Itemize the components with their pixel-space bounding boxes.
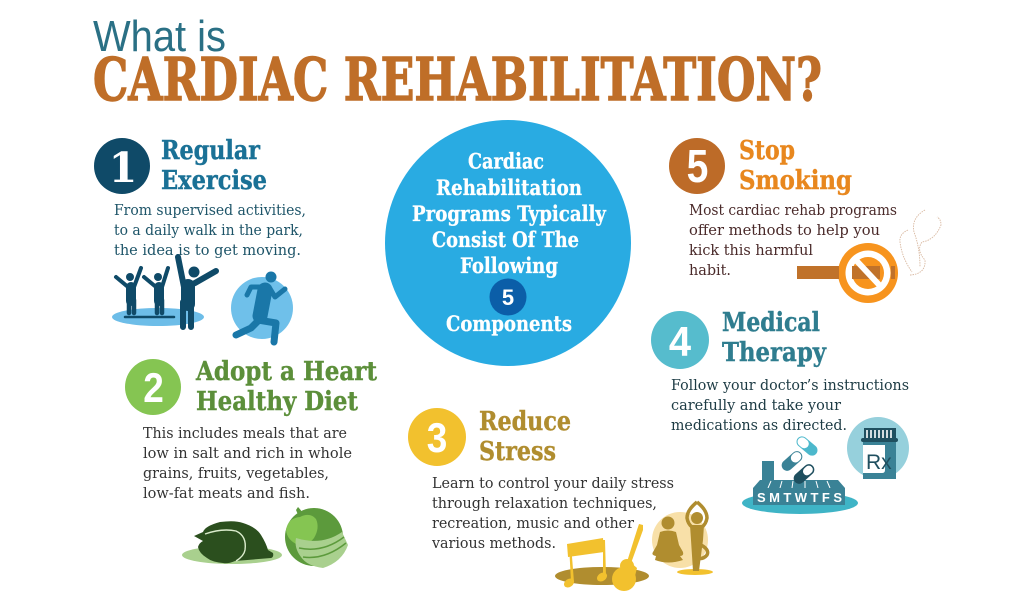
heading: adopt a heart healthy diet: Healthy Diet bbox=[196, 387, 358, 417]
panel: regular exercise bbox=[94, 136, 306, 342]
central circle: Programs Typically bbox=[412, 202, 606, 227]
number badge 4 bbox=[651, 311, 709, 369]
central circle: Following bbox=[460, 254, 558, 279]
heading: reduce stress: Reduce bbox=[479, 407, 571, 437]
icon: weekly pill box: SMTWTFS bbox=[757, 490, 842, 505]
number badge 3: 3 bbox=[427, 415, 447, 462]
icon: prescription bottle bbox=[847, 417, 909, 479]
text: smoking description bbox=[689, 203, 897, 279]
heading: medical therapy: Therapy bbox=[722, 338, 827, 368]
central circle: Components bbox=[446, 312, 572, 337]
central circle: Cardiac bbox=[468, 150, 544, 174]
pill: light bbox=[794, 434, 820, 458]
icon: group of people exercising bbox=[112, 257, 216, 327]
number badge 5: 5 bbox=[687, 141, 708, 193]
number badge 1: 1 bbox=[109, 144, 137, 192]
text: exercise description: to a daily walk in the park, bbox=[114, 223, 303, 239]
icon: apple and cabbage bbox=[285, 507, 348, 568]
icon: no smoking sign bbox=[797, 243, 898, 303]
heading: medical therapy bbox=[722, 308, 827, 368]
panel: heart healthy diet bbox=[125, 357, 377, 568]
text: diet description: grains, fruits, vegetables, bbox=[143, 466, 329, 482]
icon: smoke wisps bbox=[900, 210, 941, 275]
text: stress description: various methods. bbox=[431, 536, 556, 552]
heading: stop smoking: Stop bbox=[739, 136, 795, 166]
heading: reduce stress: Stress bbox=[479, 437, 556, 467]
title: What is bbox=[93, 12, 226, 61]
icon: roast chicken bbox=[182, 521, 282, 564]
text: exercise description: From supervised activities, bbox=[114, 203, 306, 219]
heading: regular exercise: Exercise bbox=[161, 166, 267, 196]
number badge 2 bbox=[125, 359, 181, 415]
panel: stop smoking bbox=[669, 136, 941, 303]
icon: prescription bottle: Rx bbox=[866, 451, 892, 474]
text: smoking description: kick this harmful bbox=[689, 243, 813, 259]
heading: stop smoking: Smoking bbox=[739, 166, 852, 196]
icon: music notes and guitar bbox=[555, 524, 649, 591]
central circle: Rehabilitation bbox=[436, 176, 582, 201]
text: stress description: through relaxation techniques, bbox=[432, 496, 657, 512]
text: diet description: low in salt and rich in whole bbox=[143, 446, 352, 462]
text: therapy description bbox=[671, 378, 909, 434]
panel: reduce stress bbox=[408, 407, 713, 591]
text: exercise description bbox=[114, 203, 306, 259]
heading: reduce stress bbox=[479, 407, 571, 467]
central circle: 5 bbox=[502, 285, 514, 310]
text: therapy description: Follow your doctor’s instructions bbox=[671, 378, 909, 394]
number badge 5 bbox=[669, 138, 725, 194]
text: stress description: recreation, music and other bbox=[432, 516, 634, 532]
heading: regular exercise bbox=[161, 136, 267, 196]
number badge 2: 2 bbox=[143, 365, 164, 412]
pill: dark bbox=[791, 462, 817, 486]
heading: stop smoking bbox=[739, 136, 852, 196]
icon: runner bbox=[231, 272, 293, 342]
heading: adopt a heart healthy diet: Adopt a Heart bbox=[195, 357, 377, 387]
icon: weekly pill box bbox=[742, 434, 858, 514]
text: smoking description: Most cardiac rehab programs bbox=[689, 203, 897, 219]
central circle: Consist Of The bbox=[432, 228, 579, 253]
heading: adopt a heart healthy diet bbox=[195, 357, 377, 417]
text: diet description: This includes meals that are bbox=[143, 426, 347, 442]
pill: mid bbox=[779, 449, 805, 473]
number badge 3 bbox=[408, 408, 466, 466]
icon: yoga figures bbox=[652, 502, 713, 575]
title bbox=[93, 12, 822, 114]
central circle bbox=[385, 120, 631, 366]
text: stress description: Learn to control your daily stress bbox=[432, 476, 674, 492]
text: therapy description: carefully and take your bbox=[671, 398, 841, 414]
heading: medical therapy: Medical bbox=[722, 308, 820, 338]
text: smoking description: offer methods to help you bbox=[689, 223, 880, 239]
text: stress description bbox=[431, 476, 674, 552]
panel: medical therapy bbox=[651, 308, 909, 514]
text: diet description bbox=[143, 426, 352, 502]
number badge 1 bbox=[94, 138, 150, 194]
number badge 4: 4 bbox=[669, 318, 691, 365]
text: smoking description: habit. bbox=[689, 263, 731, 279]
text: exercise description: the idea is to get moving. bbox=[114, 243, 301, 259]
heading: regular exercise: Regular bbox=[161, 136, 260, 166]
text: diet description: low-fat meats and fish. bbox=[143, 486, 310, 502]
text: therapy description: medications as directed. bbox=[671, 418, 847, 434]
